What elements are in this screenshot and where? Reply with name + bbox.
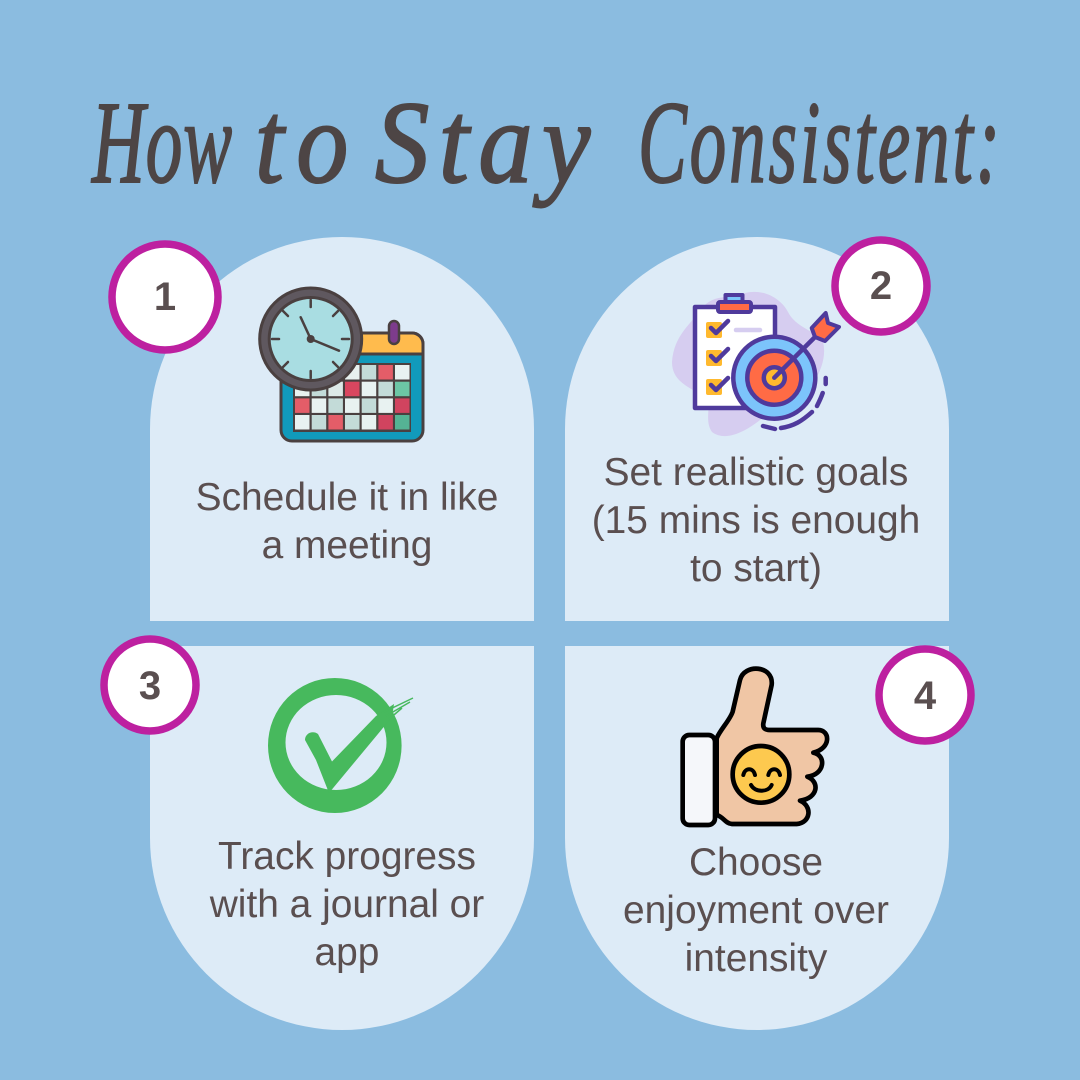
title: Stay [375, 77, 591, 208]
text: track: with a journal or [209, 883, 484, 926]
title [91, 77, 1000, 209]
icon: clock and calendar [260, 288, 423, 441]
text: track: Track progress [218, 835, 476, 878]
panel: step 4 enjoyment [565, 646, 949, 1030]
title: to [255, 78, 348, 209]
text: goals: (15 mins is enough [592, 499, 920, 542]
badge: number 1 [112, 244, 218, 350]
title: Consistent: [638, 79, 1000, 208]
text: enjoyment: intensity [685, 937, 828, 980]
badge: number 1: 1 [154, 275, 176, 319]
text: schedule: a meeting [262, 524, 432, 567]
text: schedule: Schedule it in like [196, 476, 498, 519]
text: enjoyment: Choose [689, 841, 823, 884]
badge: number 4: 4 [914, 674, 937, 718]
badge: number 4 [879, 649, 971, 741]
text: track: app [315, 931, 379, 974]
panel: step 1 schedule [150, 237, 534, 621]
text: goals: Set realistic goals [604, 451, 908, 494]
badge: number 2 [835, 240, 927, 332]
icon: green check [268, 678, 413, 813]
panel: step 2 goals [565, 237, 949, 621]
panel: step 3 track [150, 646, 534, 1030]
text: enjoyment [623, 841, 889, 980]
badge: number 3: 3 [139, 664, 161, 708]
text: goals [592, 451, 920, 590]
badge: number 2: 2 [870, 264, 892, 308]
text: enjoyment: enjoyment over [623, 889, 889, 932]
text: track [209, 835, 484, 974]
badge: number 3 [104, 639, 196, 731]
text: schedule [196, 476, 498, 567]
title: How [91, 79, 232, 208]
icon: thumbs up with smile [683, 669, 827, 825]
icon: checklist and target [672, 292, 839, 436]
text: goals: to start) [690, 547, 822, 590]
